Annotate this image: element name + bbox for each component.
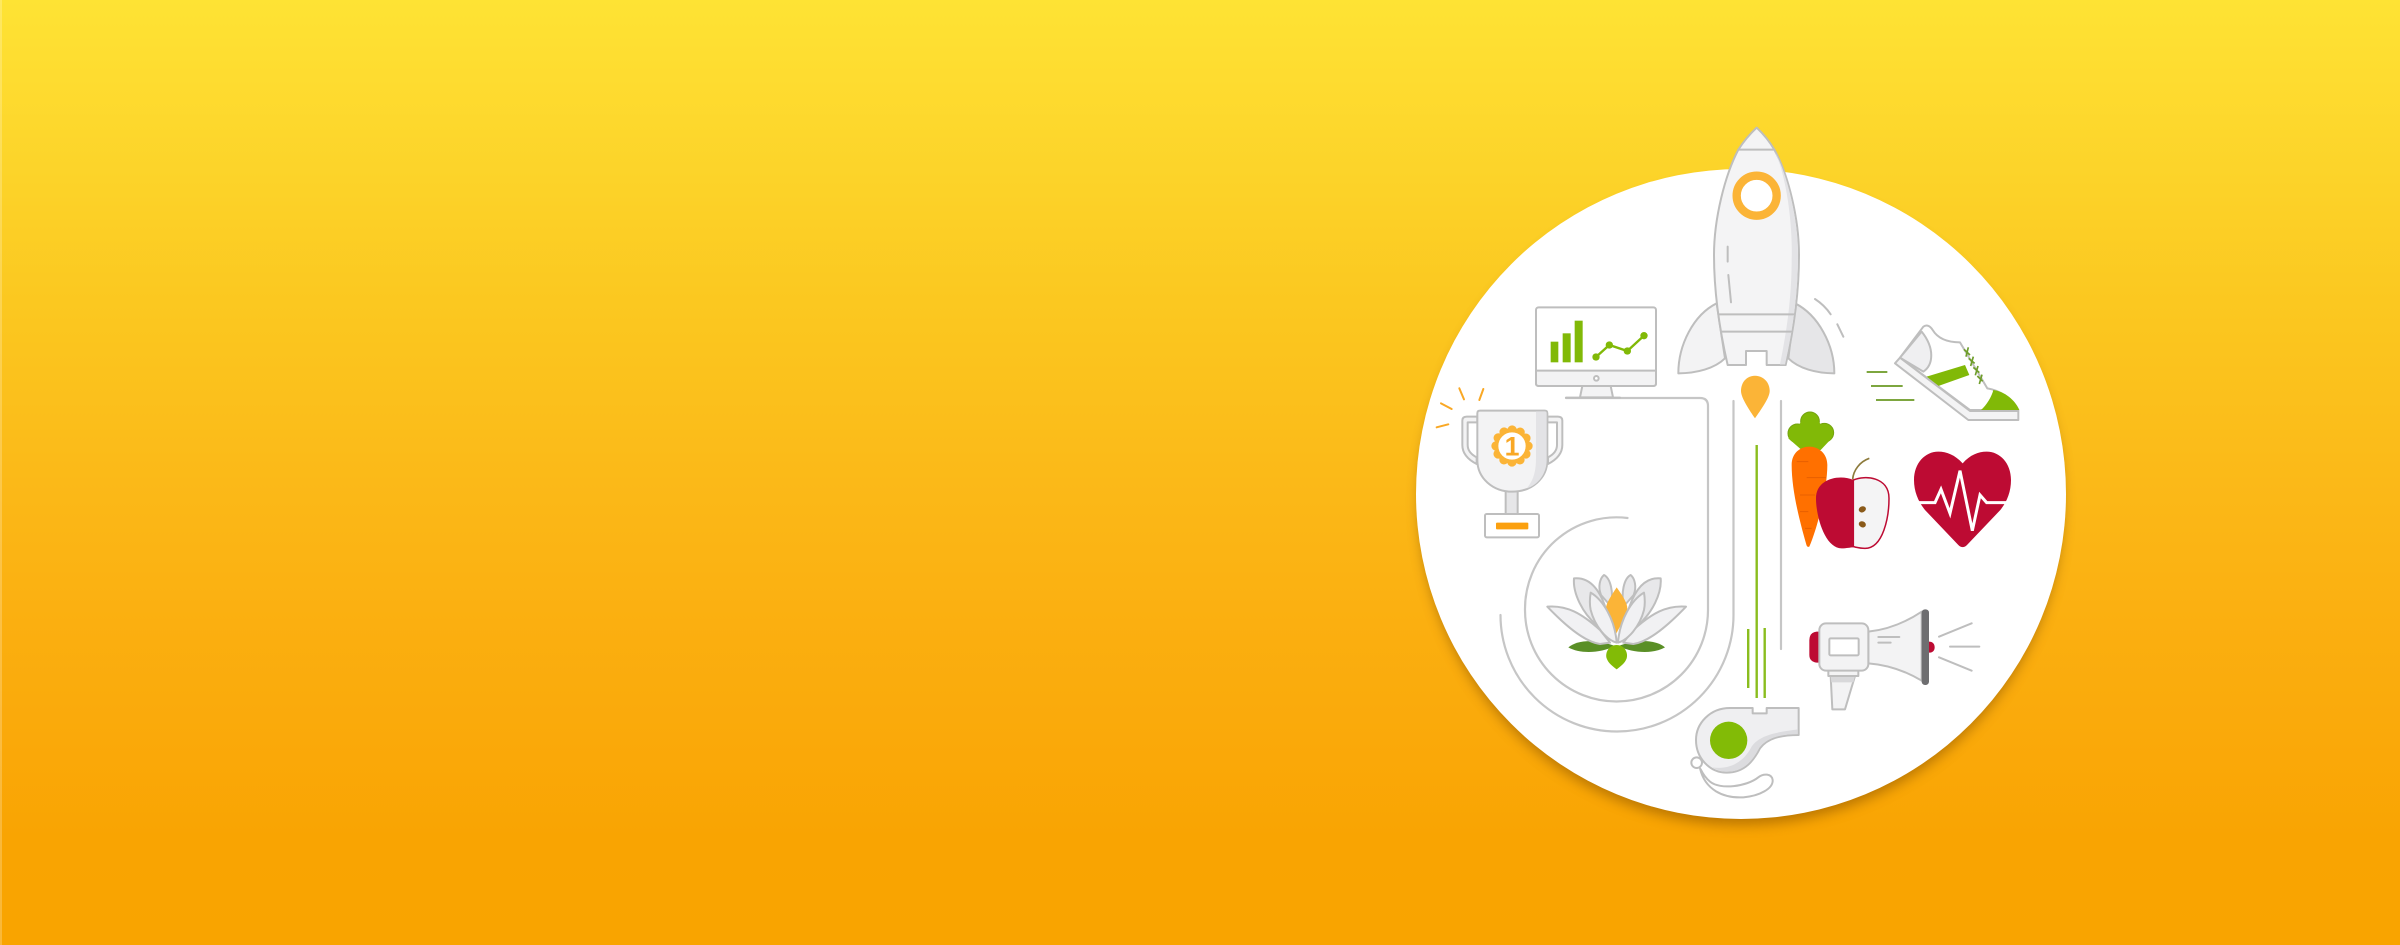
- pale left edge strip: [0, 0, 2, 945]
- inner J path line: [1525, 398, 1708, 702]
- carrot: [1788, 412, 1834, 547]
- icon: monitor with charts: [1536, 307, 1656, 398]
- icon: rocket: [1678, 128, 1843, 373]
- icon: trophy: [1437, 388, 1562, 537]
- medal with number one: [1495, 429, 1529, 463]
- icon: running shoe: [1867, 326, 2019, 420]
- medal with number one: 1: [1505, 431, 1520, 461]
- green speed lines: [1748, 445, 1765, 698]
- icon: carrot and apple: [1788, 412, 1889, 548]
- apple: [1816, 458, 1889, 548]
- outer J path line: [1500, 401, 1734, 732]
- icon: heart with pulse: [1914, 452, 2011, 547]
- icon: whistle: [1691, 708, 1799, 797]
- icon: water lily: [1547, 575, 1686, 669]
- icon: megaphone: [1809, 609, 1979, 709]
- lily leaves: [1568, 641, 1665, 652]
- icon: flame: [1741, 376, 1770, 418]
- white circle panel: [1416, 169, 2066, 819]
- right vertical line: [1780, 401, 1782, 649]
